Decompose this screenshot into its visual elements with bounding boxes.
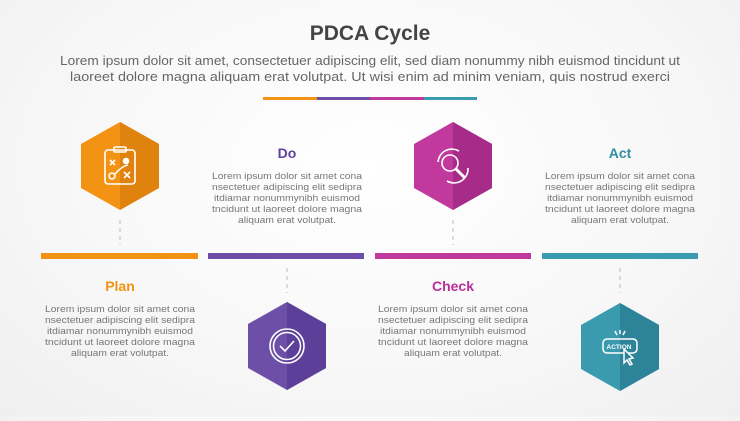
text block: Do: tncidunt ut laoreet dolore magna <box>212 204 363 214</box>
text block: Check: aliquam erat volutpat. <box>404 348 502 358</box>
timeline bars <box>41 253 698 259</box>
text block: Plan <box>45 304 196 358</box>
dashed connectors <box>120 220 620 293</box>
text block: Do: itdiamar nonummynibh euismod <box>214 193 360 203</box>
text block: Do: aliquam erat volutpat. <box>238 215 336 225</box>
text block: Act: nsectetuer adipiscing elit sedipra <box>545 182 696 192</box>
color divider <box>263 97 477 100</box>
text block: Plan: tncidunt ut laoreet dolore magna <box>45 337 196 347</box>
text block: Act <box>545 171 696 225</box>
text block: Check: itdiamar nonummynibh euismod <box>380 326 526 336</box>
text block: Check: Lorem ipsum dolor sit amet cona <box>378 304 529 314</box>
heading: Plan: Plan <box>105 278 135 294</box>
text block: Do: nsectetuer adipiscing elit sedipra <box>212 182 363 192</box>
subtitle: laoreet dolore magna aliquam erat volutpat. Ut wisi enim ad minim veniam, quis nostrud exerci <box>70 69 670 84</box>
text block: Plan: aliquam erat volutpat. <box>71 348 169 358</box>
icon: act hexagon <box>581 303 659 391</box>
text block: Check <box>378 304 529 358</box>
text block: Plan: nsectetuer adipiscing elit sedipra <box>45 315 196 325</box>
text block: Act: itdiamar nonummynibh euismod <box>547 193 693 203</box>
subtitle <box>60 53 680 84</box>
text block: Do <box>212 171 363 225</box>
text block: Plan: itdiamar nonummynibh euismod <box>47 326 193 336</box>
heading: Act: Act <box>609 145 632 161</box>
text block: Plan: Lorem ipsum dolor sit amet cona <box>45 304 196 314</box>
icon: plan hexagon <box>81 122 159 210</box>
heading: Check: Check <box>432 278 474 294</box>
icon: check hexagon <box>414 122 492 210</box>
subtitle: Lorem ipsum dolor sit amet, consectetuer adipiscing elit, sed diam nonummy nibh euismod tincidunt ut <box>60 53 680 68</box>
icon: act hexagon: ACTION <box>607 344 632 351</box>
text block: Do: Lorem ipsum dolor sit amet cona <box>212 171 363 181</box>
text block: Act: Lorem ipsum dolor sit amet cona <box>545 171 696 181</box>
heading: Do: Do <box>278 145 296 161</box>
text block: Act: tncidunt ut laoreet dolore magna <box>545 204 696 214</box>
title: PDCA Cycle <box>310 22 430 45</box>
text block: Check: tncidunt ut laoreet dolore magna <box>378 337 529 347</box>
text block: Act: aliquam erat volutpat. <box>571 215 669 225</box>
icon: do hexagon <box>248 302 326 390</box>
text block: Check: nsectetuer adipiscing elit sedipra <box>378 315 529 325</box>
